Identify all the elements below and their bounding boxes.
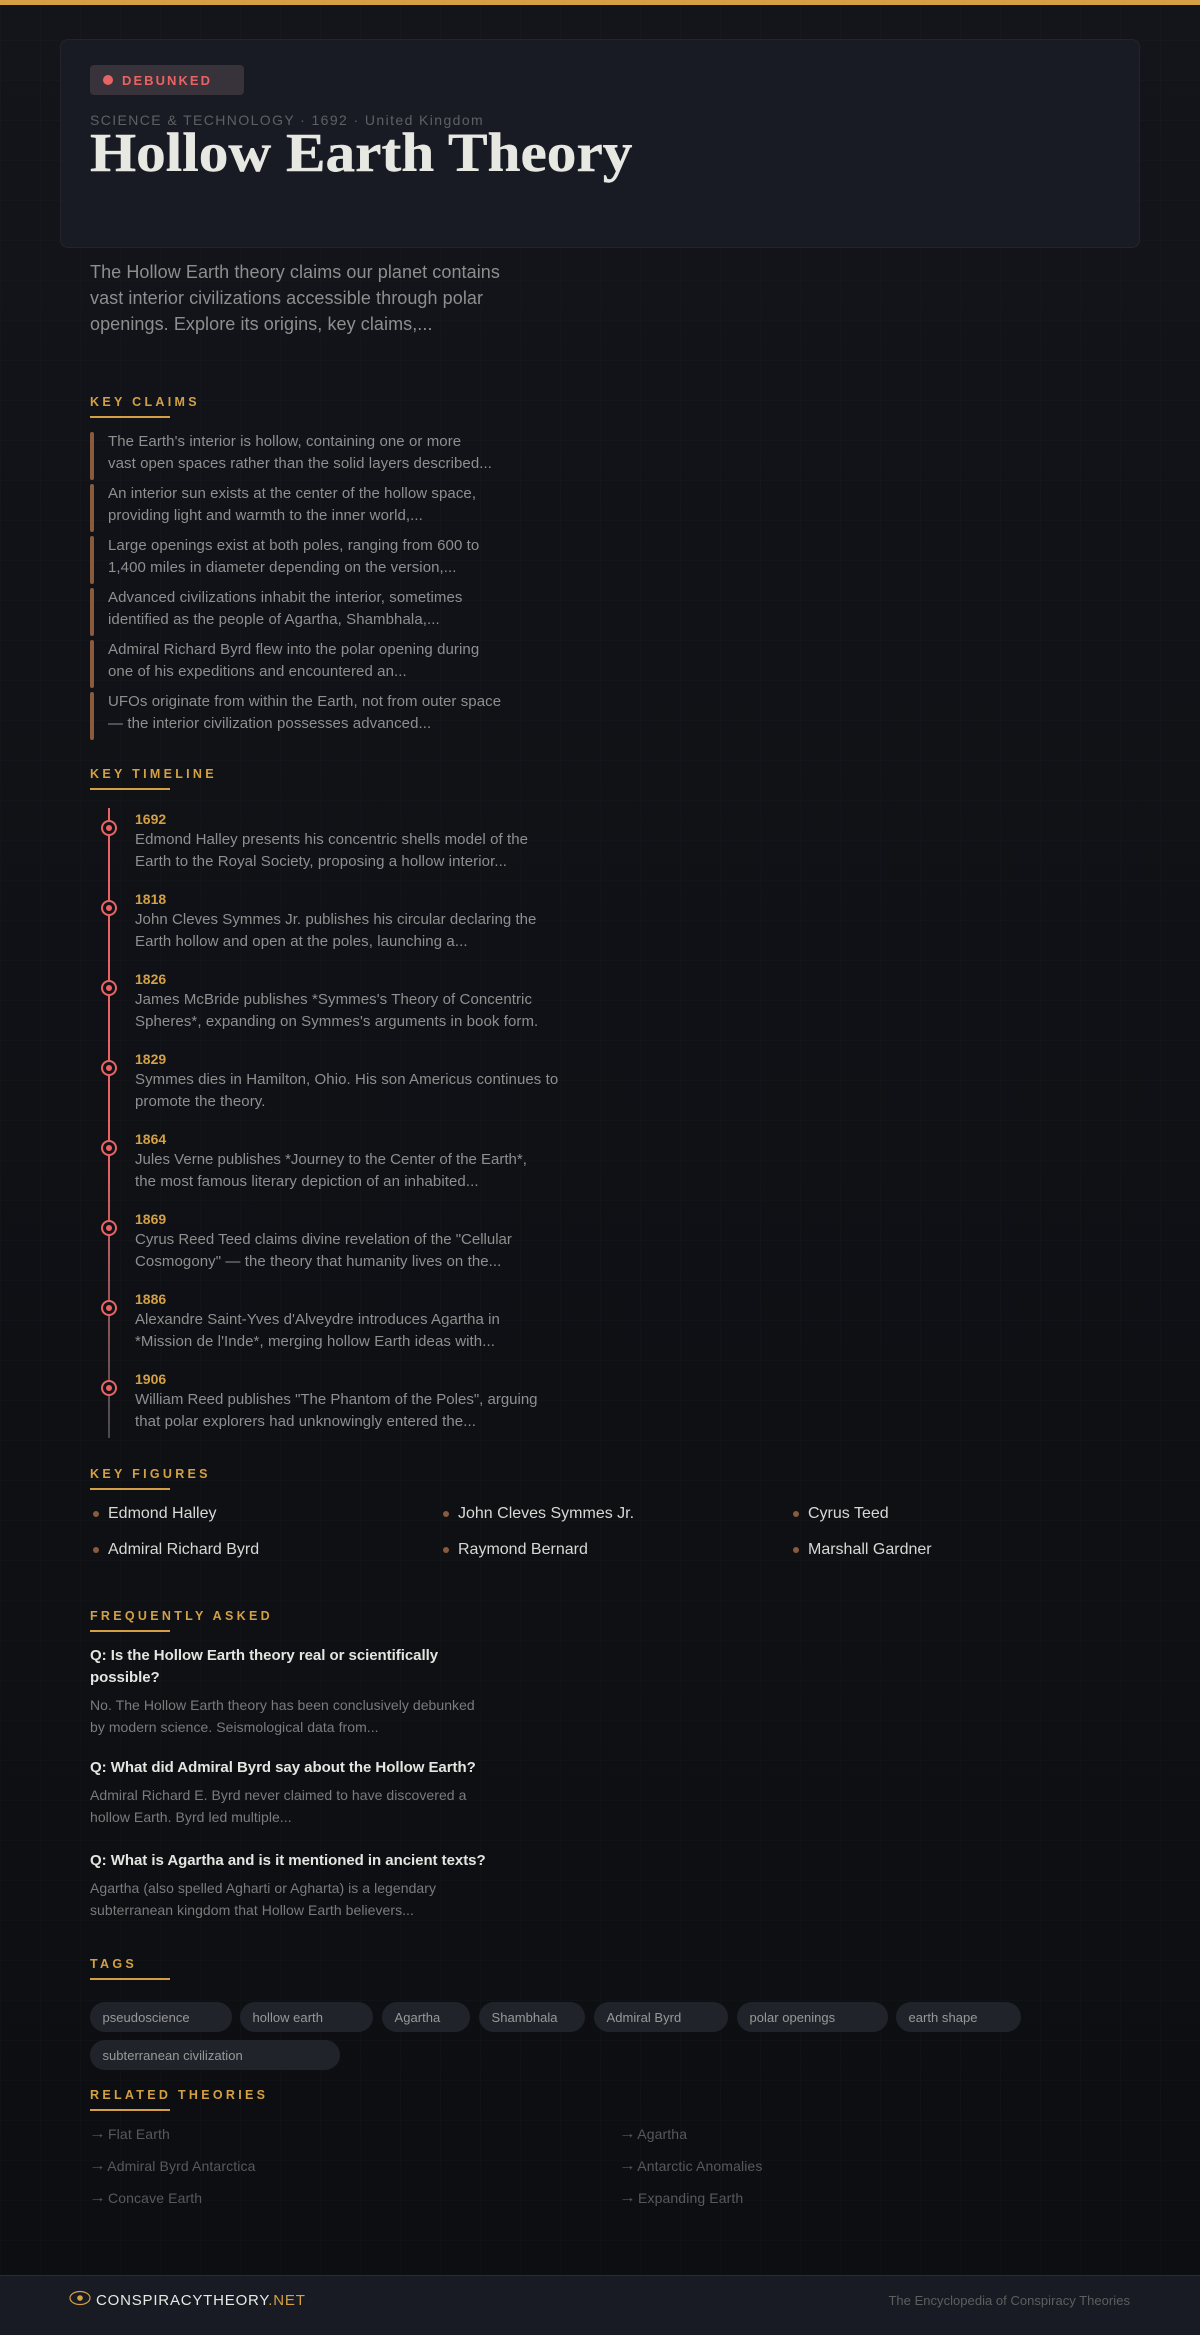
event 1864: 1864 [135,1131,166,1147]
event 1692: 1692 [135,811,166,827]
tag: subterranean civilization [90,2040,340,2070]
heading: frequently asked: FREQUENTLY ASKED [90,1609,273,1623]
claim 1 [90,432,492,480]
related: Flat Earth: → [89,2125,106,2141]
status badge: debunked [90,65,244,95]
related: Admiral Byrd Antarctica: → [89,2157,106,2173]
event 1906: that polar explorers had unknowingly entered the... [135,1413,476,1430]
event 1864 [101,1131,527,1190]
claim 3 [90,536,479,584]
event 1906: 1906 [135,1371,166,1387]
event 1829: 1829 [135,1051,166,1067]
event 1826: James McBride publishes *Symmes's Theory of Concentric [135,991,532,1008]
event 1864: Jules Verne publishes *Journey to the Center of the Earth*, [135,1151,527,1168]
faq 2: Admiral Richard E. Byrd never claimed to have discovered a [90,1787,466,1803]
event 1829 [101,1051,558,1110]
related: Antarctic Anomalies: → [619,2157,636,2173]
tag: Admiral Byrd [594,2002,728,2032]
claim 4 [90,588,462,636]
tag: polar openings [737,2002,888,2032]
claim 3: Large openings exist at both poles, ranging from 600 to [108,537,479,554]
faq 1: by modern science. Seismological data from... [90,1719,379,1735]
event 1692: Earth to the Royal Society, proposing a hollow interior... [135,853,507,870]
figure: Marshall Gardner: Marshall Gardner [808,1541,932,1558]
event 1818: Earth hollow and open at the poles, launching a... [135,933,468,950]
related: Agartha: Agartha [637,2126,687,2142]
tag: subterranean civilization: subterranean civilization [102,2048,243,2063]
claim 3: 1,400 miles in diameter depending on the version,... [108,559,457,576]
tag: polar openings: polar openings [750,2010,835,2025]
faq 3: subterranean kingdom that Hollow Earth believers... [90,1902,414,1918]
heading: tags: TAGS [90,1957,137,1971]
panel: key figures [90,1467,932,1558]
footer [0,2275,1200,2335]
claim 5 [90,640,479,688]
related: Agartha [619,2125,687,2142]
event 1869: Cosmogony" — the theory that humanity lives on the... [135,1253,501,1270]
claim 2: providing light and warmth to the inner world,... [108,507,423,524]
claim 4: Advanced civilizations inhabit the interior, sometimes [108,589,462,606]
event 1886: 1886 [135,1291,166,1307]
icon: eye logo [69,2290,91,2306]
heading: key timeline: KEY TIMELINE [90,767,217,781]
event 1829: Symmes dies in Hamilton, Ohio. His son Americus continues to [135,1071,558,1088]
figure: Admiral Richard Byrd: Admiral Richard Byrd [108,1541,259,1558]
related: Concave Earth: Concave Earth [108,2190,202,2206]
claim 4: identified as the people of Agartha, Shambhala,... [108,611,440,628]
related: Admiral Byrd Antarctica: Admiral Byrd Antarctica [107,2158,256,2174]
panel: tags [90,1957,1021,2070]
tag: pseudoscience: pseudoscience [102,2010,190,2025]
event 1869 [101,1211,512,1270]
event 1886: *Mission de l'Inde*, merging hollow Earth ideas with... [135,1333,495,1350]
tag: hollow earth [240,2002,373,2032]
event 1692 [101,811,528,870]
event 1692: Edmond Halley presents his concentric shells model of the [135,831,528,848]
brand wordmark: CONSPIRACYTHEORY.NET [96,2292,306,2309]
intro paragraph: vast interior civilizations accessible through polar [90,288,483,308]
faq 2: Q: What did Admiral Byrd say about the Hollow Earth? [90,1759,476,1776]
figure: John Cleves Symmes Jr.: John Cleves Symmes Jr. [458,1505,634,1522]
faq 3 [90,1852,486,1918]
claim 6: UFOs originate from within the Earth, not from outer space [108,693,501,710]
tag: Agartha [382,2002,470,2032]
claim 6: — the interior civilization possesses advanced... [108,715,431,732]
tag: Admiral Byrd: Admiral Byrd [606,2010,681,2025]
tag: earth shape: earth shape [908,2010,978,2025]
event 1906: William Reed publishes "The Phantom of the Poles", arguing [135,1391,538,1408]
event 1869: Cyrus Reed Teed claims divine revelation of the "Cellular [135,1231,512,1248]
title: Hollow Earth Theory [90,122,632,183]
related: Flat Earth: Flat Earth [108,2126,170,2142]
event 1829: promote the theory. [135,1093,265,1110]
intro paragraph [90,262,500,334]
intro paragraph: The Hollow Earth theory claims our planet contains [90,262,500,282]
intro paragraph: openings. Explore its origins, key claims,... [90,314,433,334]
related: Expanding Earth: → [619,2189,636,2205]
event 1906 [101,1371,538,1430]
hero card [60,39,1140,248]
event 1818: 1818 [135,891,166,907]
status badge: debunked: DEBUNKED [122,73,212,88]
tag: hollow earth: hollow earth [252,2010,323,2025]
tag: Shambhala [479,2002,585,2032]
faq 3: Q: What is Agartha and is it mentioned in ancient texts? [90,1852,486,1869]
event 1826 [101,971,538,1030]
faq 1: possible? [90,1669,160,1686]
faq 2: hollow Earth. Byrd led multiple... [90,1809,292,1825]
event 1869: 1869 [135,1211,166,1227]
figure: Raymond Bernard: Raymond Bernard [458,1541,588,1558]
event 1818: John Cleves Symmes Jr. publishes his circular declaring the [135,911,536,928]
tag: pseudoscience [90,2002,232,2032]
category meta line: SCIENCE & TECHNOLOGY · 1692 · United Kingdom [90,112,484,128]
heading: key figures: KEY FIGURES [90,1467,211,1481]
panel: frequently asked [90,1609,486,1918]
tag: Agartha: Agartha [394,2010,440,2025]
timeline axis [108,808,110,1438]
heading: key claims: KEY CLAIMS [90,395,200,409]
claim 1: vast open spaces rather than the solid layers described... [108,455,492,472]
related: Antarctic Anomalies: Antarctic Anomalies [637,2158,762,2174]
event 1826: 1826 [135,971,166,987]
heading: related theories: RELATED THEORIES [90,2088,268,2102]
event 1864: the most famous literary depiction of an inhabited... [135,1173,479,1190]
related: Concave Earth: → [89,2189,106,2205]
faq 1: Q: Is the Hollow Earth theory real or scientifically [90,1647,438,1664]
panel: related theories [89,2088,762,2206]
claim 5: one of his expeditions and encountered an... [108,663,407,680]
claim 2 [90,484,476,532]
related: Agartha: → [619,2125,636,2141]
tag: Shambhala: Shambhala [492,2010,558,2025]
faq 3: Agartha (also spelled Agharti or Agharta) is a legendary [90,1880,436,1896]
faq 1 [90,1647,475,1735]
figure: Edmond Halley: Edmond Halley [108,1505,216,1522]
event 1818 [101,891,536,950]
event 1886: Alexandre Saint-Yves d'Alveydre introduces Agartha in [135,1311,500,1328]
claim 5: Admiral Richard Byrd flew into the polar opening during [108,641,479,658]
badge dot [103,75,113,85]
top accent bar [0,0,1200,5]
figure: Cyrus Teed: Cyrus Teed [808,1505,889,1522]
claim 6 [90,692,501,740]
faq 1: No. The Hollow Earth theory has been conclusively debunked [90,1697,475,1713]
event 1826: Spheres*, expanding on Symmes's arguments in book form. [135,1013,538,1030]
related: Expanding Earth: Expanding Earth [638,2190,743,2206]
tagline: The Encyclopedia of Conspiracy Theories [888,2293,1130,2308]
faq 2 [90,1759,476,1825]
panel: key claims [90,395,501,740]
claim 1: The Earth's interior is hollow, containing one or more [108,433,461,450]
panel: key timeline [90,767,558,1438]
event 1886 [101,1291,500,1350]
tag: earth shape [896,2002,1021,2032]
claim 2: An interior sun exists at the center of the hollow space, [108,485,476,502]
